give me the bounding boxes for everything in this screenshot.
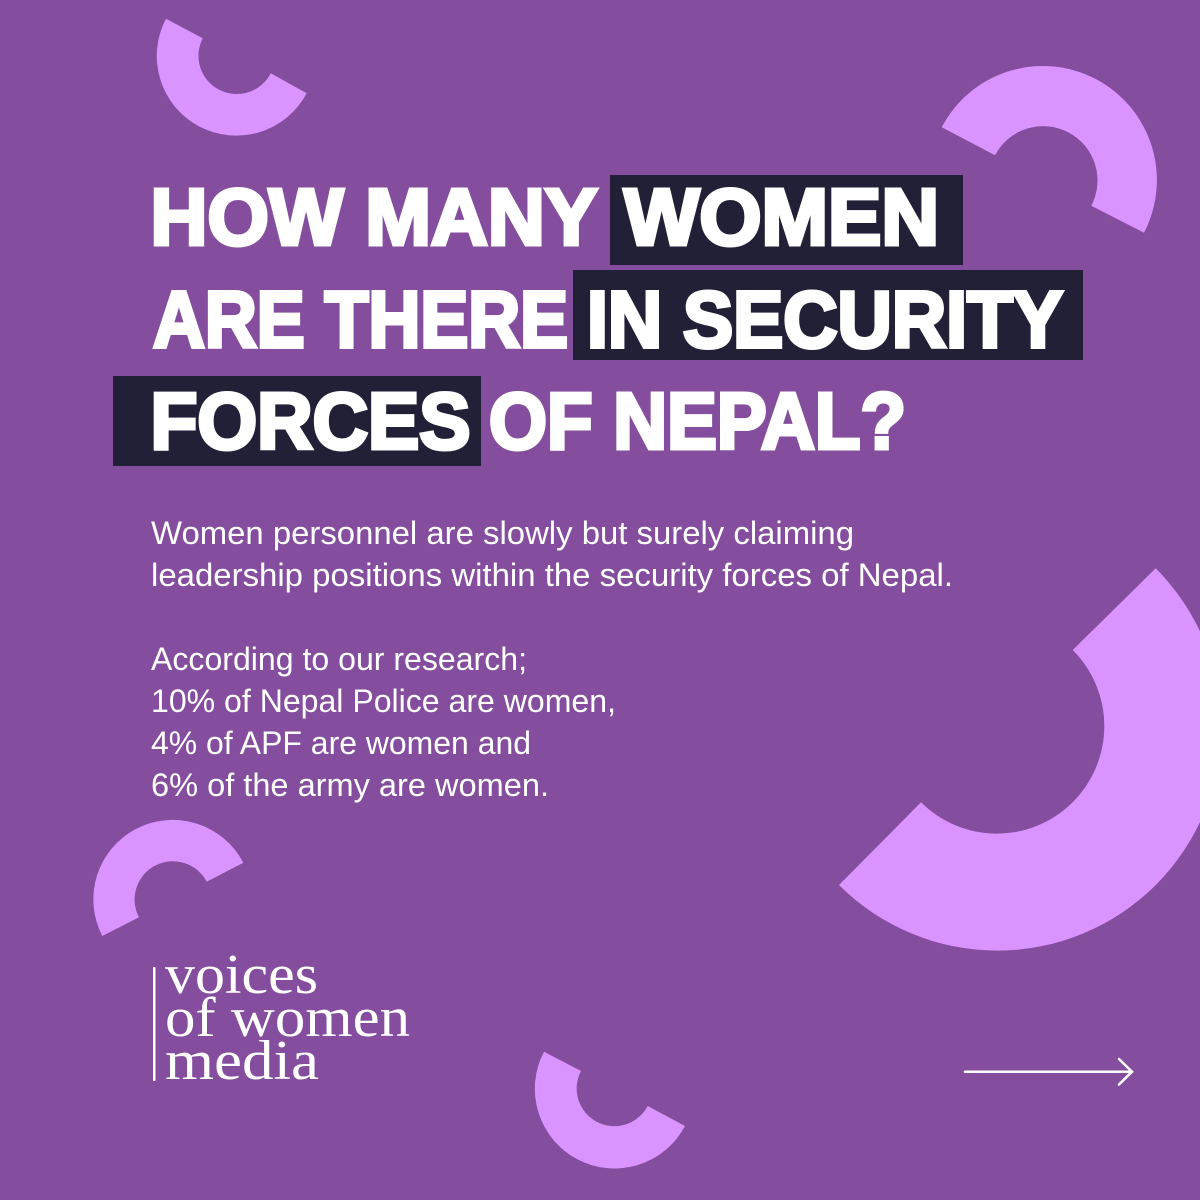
title word: are there: ARE THERE xyxy=(153,275,568,364)
intro text block: leadership positions within the security forces of Nepal. xyxy=(151,557,953,593)
highlight: in security xyxy=(573,270,1083,360)
logo: voices of women media: voices xyxy=(165,944,318,1006)
decorative arc: top left xyxy=(157,19,307,136)
intro text block: Women personnel are slowly but surely claiming xyxy=(151,515,854,551)
title word: of nepal: OF NEPAL? xyxy=(489,376,906,465)
arrow xyxy=(965,1059,1132,1084)
research statistics text block: 4% of APF are women and xyxy=(151,725,531,761)
title word: in security: IN SECURITY xyxy=(587,275,1063,364)
title word: forces: FORCES xyxy=(150,376,470,465)
title word: women: WOMEN xyxy=(624,173,939,262)
research statistics text block: 6% of the army are women. xyxy=(151,767,549,803)
decorative arc: lower left xyxy=(93,820,243,936)
title xyxy=(113,173,1083,466)
logo: voices of women media xyxy=(153,944,410,1092)
logo: voices of women media: of women xyxy=(165,987,410,1049)
highlight: women xyxy=(610,175,963,265)
research statistics text block: 10% of Nepal Police are women, xyxy=(151,683,616,719)
research statistics text block xyxy=(151,641,616,803)
intro text block xyxy=(151,515,953,593)
logo: voices of women media: media xyxy=(165,1030,319,1092)
title word: how many: HOW MANY xyxy=(150,173,598,262)
research statistics text block: According to our research; xyxy=(151,641,527,677)
highlight: forces xyxy=(113,376,481,466)
decorative arc: bottom centre xyxy=(535,1052,685,1168)
decorative arc: large right xyxy=(839,568,1200,951)
decorative arc: top right xyxy=(942,66,1157,233)
